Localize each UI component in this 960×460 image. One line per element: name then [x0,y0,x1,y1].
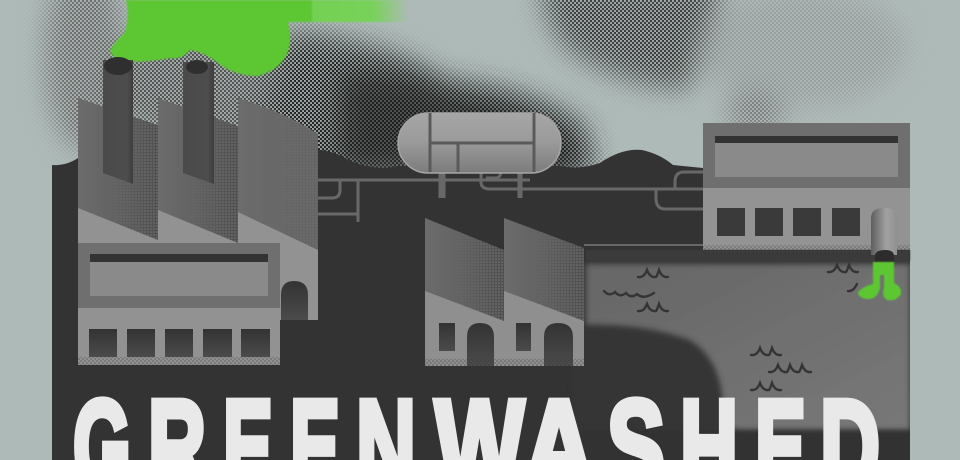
chimney 1 [103,57,133,184]
door [281,281,308,320]
water [570,240,940,460]
light wall body [78,205,318,365]
ground [52,150,910,460]
drain pipe [871,208,897,255]
sawtooth roof panels [78,98,318,250]
toxic green discharge [858,262,901,300]
pipes [318,172,703,245]
chimney 2 [183,60,214,184]
storage tank [398,113,561,173]
left factory [78,57,318,365]
windows [89,329,270,357]
water ripples [604,265,858,390]
centre factory [425,218,584,366]
upper band [78,243,280,308]
smoke clouds [0,0,960,240]
right factory [586,123,910,262]
green smoke [110,0,410,76]
